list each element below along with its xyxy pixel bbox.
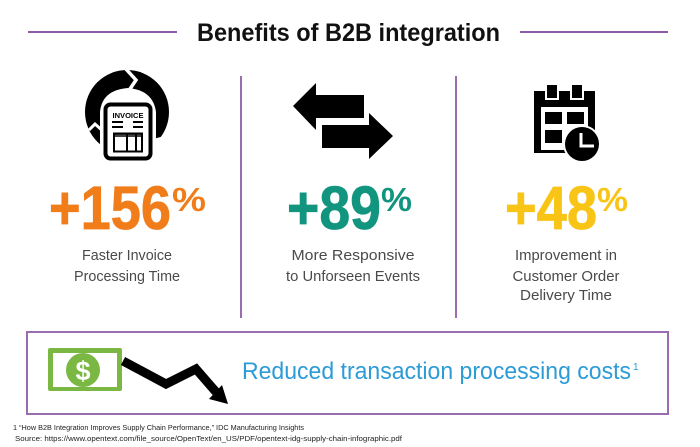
- icon: invoice with circular arrows: [85, 68, 172, 160]
- label: delivery time: Customer Order: [512, 268, 620, 285]
- label: delivery time: Delivery Time: [520, 287, 612, 304]
- icon: dollar bill: $: [75, 356, 91, 386]
- stat: +48%: %: [597, 181, 628, 218]
- label: responsive: More Responsive: [292, 247, 414, 264]
- stat: +48%: +48: [505, 174, 597, 242]
- icon: invoice with circular arrows: INVOICE: [112, 111, 144, 120]
- panel: reduced costs: 1: [633, 362, 639, 373]
- stat: +156%: +156: [49, 174, 171, 242]
- footnote: 1 “How B2B Integration Improves Supply Chain Performance,” IDC Manufacturing Insights: [13, 423, 304, 432]
- footnote: Source: https://www.opentext.com/file_source/OpenText/en_US/PDF/opentext-idg-supply-chain-infographic.pdf: [15, 434, 403, 443]
- label: delivery time: [512, 247, 620, 304]
- icon: falling arrow: [123, 361, 228, 404]
- label: responsive: [286, 247, 420, 285]
- stat: +89%: +89: [287, 174, 381, 242]
- text: reduced transaction processing costs: Reduced transaction processing costs: [242, 358, 631, 385]
- icon: dollar bill: [48, 348, 122, 391]
- title: Benefits of B2B integration: [197, 19, 500, 47]
- stat: +89%: %: [381, 181, 412, 218]
- footnote: [13, 423, 403, 443]
- panel: reduced costs: [27, 332, 668, 414]
- label: invoice processing: Processing Time: [74, 268, 180, 285]
- label: invoice processing: Faster Invoice: [82, 247, 172, 264]
- label: invoice processing: [74, 247, 180, 285]
- icon: calendar with clock: [534, 85, 601, 163]
- label: responsive: to Unforseen Events: [286, 268, 420, 285]
- stat: +156%: %: [172, 181, 206, 218]
- icon: opposing arrows: [293, 83, 393, 159]
- label: delivery time: Improvement in: [515, 247, 617, 264]
